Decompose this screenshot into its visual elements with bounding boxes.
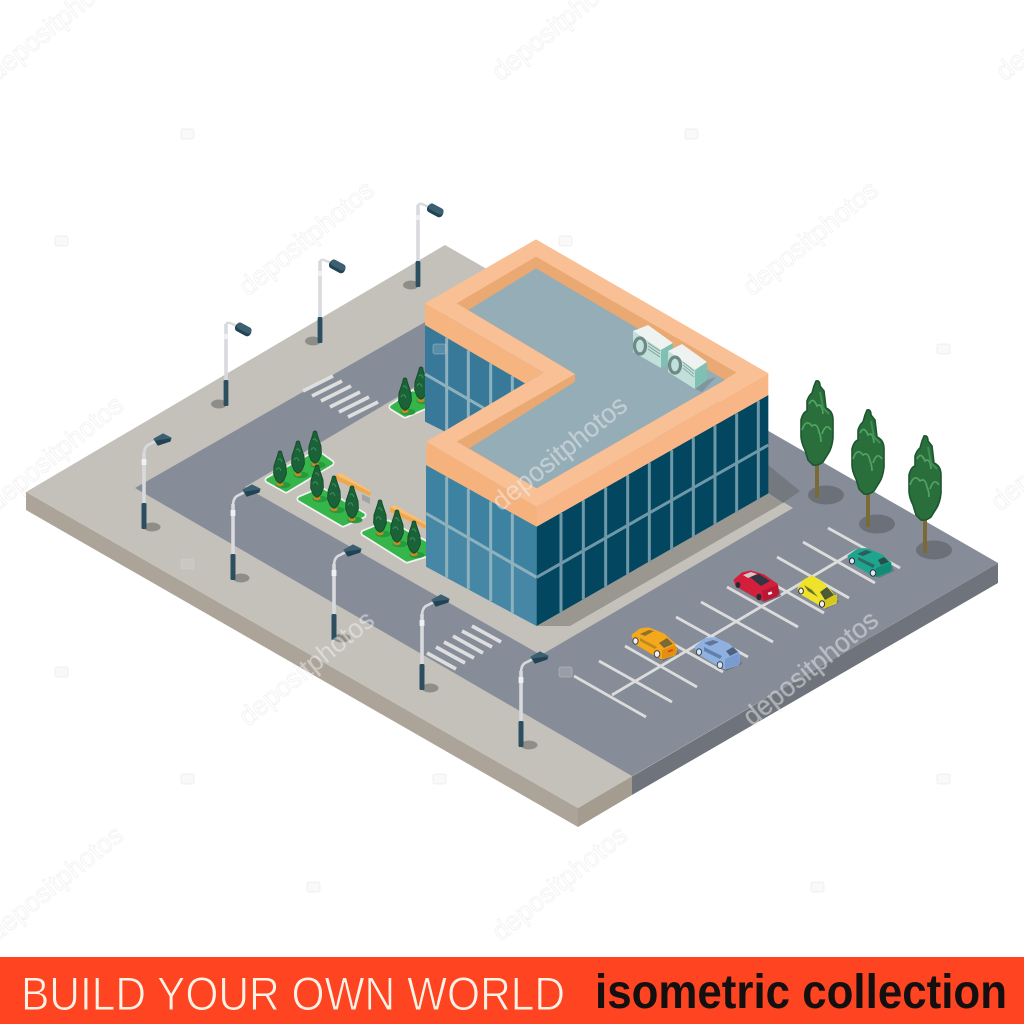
parapet top band — [425, 239, 768, 507]
watermark: depositphotos — [737, 605, 884, 732]
street lamps front row — [142, 434, 548, 750]
car orange — [632, 628, 679, 661]
air conditioner unit one — [633, 325, 673, 368]
road and parking surface — [135, 278, 998, 776]
flat roof — [468, 268, 725, 488]
tree east one — [801, 381, 844, 504]
plaza pavement — [245, 372, 793, 655]
parapet inner face — [457, 257, 737, 488]
watermark: depositphotos — [486, 390, 633, 517]
parking bay lines — [574, 528, 900, 717]
car red convertible — [734, 571, 781, 603]
watermark: depositphotos — [233, 175, 380, 302]
lower wing south-west glass wall — [426, 465, 537, 626]
crosswalk south — [427, 626, 501, 669]
crosswalk north — [303, 376, 378, 417]
car yellow — [798, 576, 839, 609]
tree east two — [852, 410, 895, 534]
ground slab — [26, 245, 998, 827]
planter two — [300, 465, 363, 524]
car teal — [848, 549, 894, 578]
building shadow — [537, 465, 800, 626]
planter three — [364, 500, 430, 560]
watermark: depositphotos — [233, 605, 380, 732]
upper wing glass wall — [425, 325, 525, 432]
banner slogan: BUILD YOUR OWN WORLD — [21, 967, 565, 1020]
tree east three — [909, 436, 952, 560]
planter north — [392, 367, 432, 415]
air conditioner unit two — [668, 344, 716, 392]
office building — [425, 239, 768, 626]
bench two — [390, 505, 426, 529]
street lamps back row — [211, 202, 445, 408]
planter one — [268, 431, 331, 490]
car blue — [695, 638, 742, 671]
south-east glass wall — [537, 395, 768, 626]
parapet outer faces — [425, 303, 768, 527]
watermark: depositphotos — [486, 820, 633, 947]
watermark: depositphotos — [737, 175, 884, 302]
banner — [0, 957, 1024, 1024]
bench one — [336, 473, 371, 504]
